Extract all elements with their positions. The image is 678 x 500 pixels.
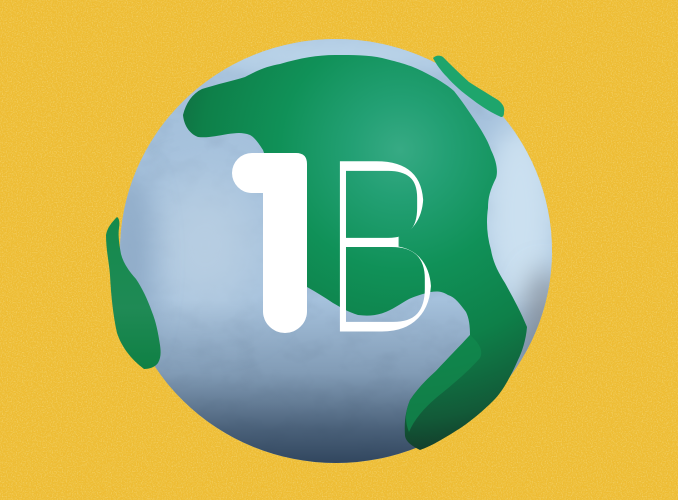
heading: 1B [232, 153, 431, 333]
letter B: B [318, 99, 447, 392]
continent: lighter fold of lower arm [406, 335, 481, 432]
globe [106, 30, 565, 470]
continent: small strip at top right [433, 56, 504, 117]
numeral 1: 1 [222, 116, 351, 375]
globe body: blue clay ball [108, 30, 565, 470]
continent: large central landmass [183, 55, 527, 450]
continent: left edge landmass [106, 217, 161, 369]
